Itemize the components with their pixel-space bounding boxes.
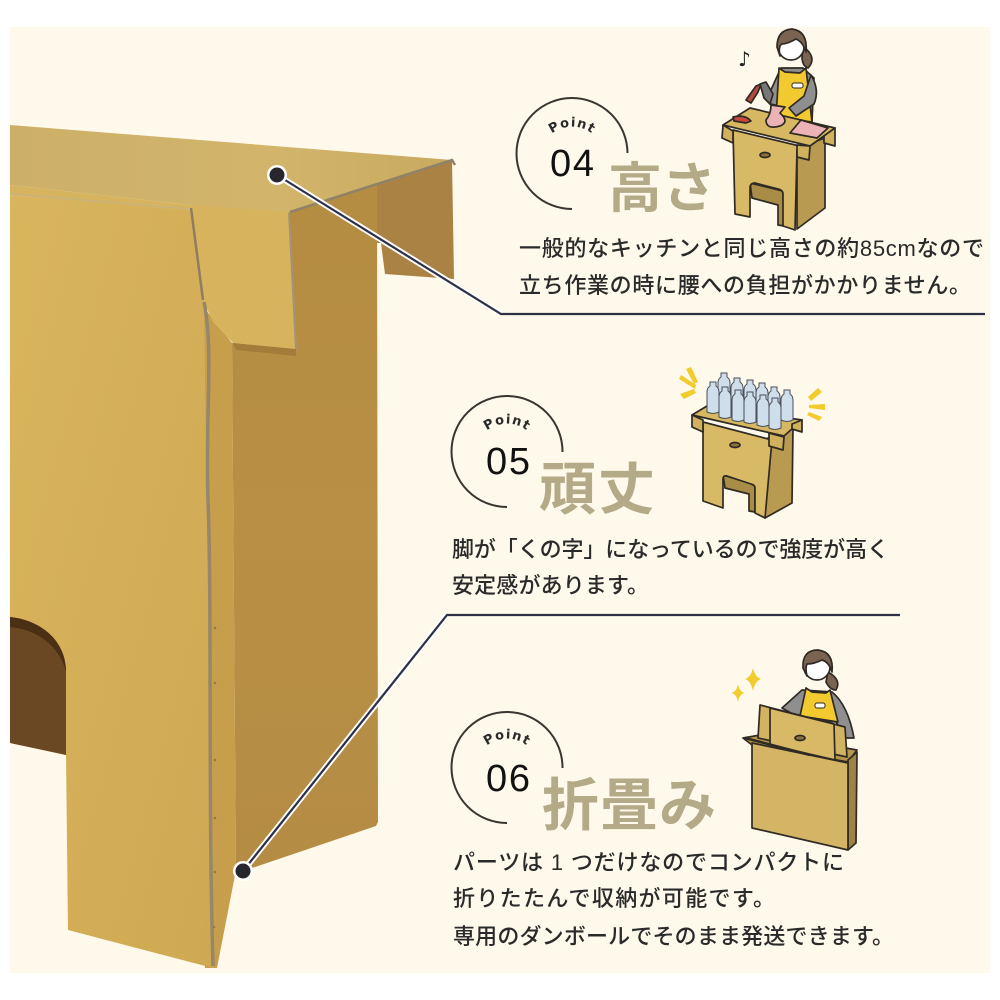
photo: cardboard table close-up xyxy=(10,125,455,968)
narrow folded side strip xyxy=(198,300,236,968)
point 06 badge: 06 xyxy=(486,758,531,800)
sparkles xyxy=(732,668,761,702)
body text: point 04: 一般的なキッチンと同じ高さの約85cmなので xyxy=(519,236,984,261)
folded panel inner xyxy=(770,708,835,760)
table flaps xyxy=(722,125,835,160)
box top edge band xyxy=(745,738,810,755)
body text: point 04 xyxy=(519,236,984,298)
woman xyxy=(770,29,816,122)
table side xyxy=(797,138,825,229)
illustration: woman holding folded table xyxy=(732,650,857,850)
hand hole xyxy=(730,442,740,448)
body text: point 06: 折りたたんで収納が可能です。 xyxy=(453,886,775,911)
staple dots xyxy=(213,627,216,928)
shipping box front xyxy=(752,743,848,850)
illustration: woman working at cardboard table xyxy=(722,29,835,230)
point 05 badge: 05 xyxy=(486,441,531,483)
body text: point 05: 安定感があります。 xyxy=(452,573,649,598)
teapot, cloth and towels xyxy=(733,82,828,138)
shipping box side xyxy=(848,752,857,850)
hand hole xyxy=(760,152,770,158)
arch opening shadow xyxy=(10,617,66,755)
point 05 badge: Point xyxy=(483,414,530,430)
point 04 badge: 04 xyxy=(550,143,595,185)
large side face of the leg xyxy=(232,184,378,870)
table top xyxy=(723,108,835,146)
illustration: water bottles on table xyxy=(679,367,825,518)
impact marks xyxy=(679,367,825,421)
table flaps xyxy=(692,415,802,450)
table front xyxy=(733,130,808,230)
body text: point 05 xyxy=(452,537,889,598)
body text: point 04: 立ち作業の時に腰への負担がかかりません。 xyxy=(519,273,971,298)
point 06 badge: Point xyxy=(483,728,530,745)
front folded flap xyxy=(188,200,296,349)
table top xyxy=(692,406,802,436)
hand hole xyxy=(795,736,805,740)
point 04 badge: Point xyxy=(548,116,595,133)
body text: point 06 xyxy=(453,850,894,949)
arch top shadow xyxy=(10,617,66,672)
bottles xyxy=(707,373,793,430)
body text: point 05: 脚が「くの字」になっているので強度が高く xyxy=(452,537,889,562)
front left panel with leg xyxy=(10,195,213,968)
point 05 badge xyxy=(450,395,564,508)
folded panel raised xyxy=(758,705,847,757)
leader line: point 04 xyxy=(267,165,985,314)
woman xyxy=(782,650,854,738)
table side xyxy=(765,428,793,518)
heading: 折畳み: 折畳み xyxy=(542,774,716,838)
corrugated cut edges xyxy=(290,160,455,212)
note icon: ♪ xyxy=(738,47,751,71)
point 06 badge xyxy=(450,711,564,824)
arch shade xyxy=(750,183,784,226)
top surface xyxy=(10,125,452,212)
back flap inner face xyxy=(372,160,454,279)
flap cast shadow xyxy=(233,343,296,356)
table front xyxy=(703,422,772,518)
arch shade xyxy=(723,475,755,512)
top band along front edge xyxy=(10,185,190,211)
heading: 頑丈: 頑丈 xyxy=(539,458,655,522)
heading: 高さ: 高さ xyxy=(608,159,716,219)
body text: point 06: パーツは 1 つだけなのでコンパクトに xyxy=(453,850,844,875)
body text: point 06: 専用のダンボールでそのまま発送できます。 xyxy=(453,924,894,949)
rear flap of the shipping box xyxy=(743,734,857,762)
leader line: points 05 and 06 xyxy=(233,615,900,881)
point 04 badge xyxy=(516,97,628,210)
